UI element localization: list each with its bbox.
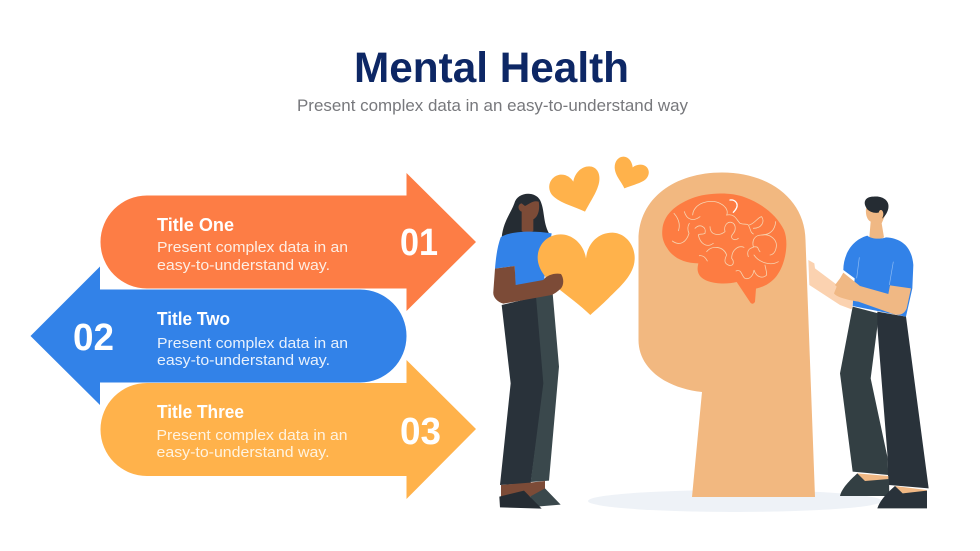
number 03: 03 bbox=[400, 411, 441, 453]
neck and face bbox=[866, 207, 886, 239]
hair bbox=[502, 194, 549, 237]
illustration: woman holding heart bbox=[493, 194, 635, 509]
trousers bbox=[840, 307, 888, 475]
shirt bbox=[843, 236, 913, 317]
forearm and hand bbox=[834, 273, 911, 315]
shoes bbox=[840, 473, 889, 496]
heading: title two: Title Two bbox=[157, 309, 230, 329]
icon: brain bbox=[662, 194, 786, 304]
text: description three: Present complex data in an bbox=[156, 427, 348, 444]
arrow panel: 01 bbox=[101, 173, 476, 311]
subtitle: Present complex data in an easy-to-understand way bbox=[297, 96, 688, 115]
arrow panel: 02 bbox=[30, 266, 406, 405]
text: description three: easy-to-understand way. bbox=[156, 444, 330, 461]
hair bbox=[865, 196, 889, 219]
arm and hand bbox=[493, 266, 563, 304]
shirt bbox=[495, 232, 552, 285]
icon: small hearts bbox=[549, 157, 649, 212]
ground shadow bbox=[588, 490, 882, 512]
neck and face bbox=[519, 201, 539, 233]
sleeve lines bbox=[857, 257, 893, 285]
arrow panel: 03 bbox=[101, 360, 476, 499]
illustration: man bbox=[808, 196, 929, 508]
text: description two: easy-to-understand way. bbox=[157, 352, 330, 369]
arm behind head bbox=[808, 260, 853, 309]
shoes bbox=[530, 488, 561, 507]
number 02: 02 bbox=[73, 317, 114, 359]
trousers bbox=[500, 297, 544, 485]
title: Mental Health bbox=[354, 44, 629, 92]
text: description two: Present complex data in an bbox=[157, 335, 348, 352]
number 01: 01 bbox=[400, 222, 438, 264]
text: description one: easy-to-understand way. bbox=[157, 257, 330, 274]
text: description one: Present complex data in an bbox=[157, 239, 348, 256]
heading: title one: Title One bbox=[157, 215, 234, 235]
ankles bbox=[857, 473, 927, 493]
heading: title three: Title Three bbox=[157, 402, 244, 422]
legs bbox=[501, 481, 545, 497]
big heart bbox=[538, 233, 635, 315]
illustration: head with brain bbox=[638, 172, 815, 497]
